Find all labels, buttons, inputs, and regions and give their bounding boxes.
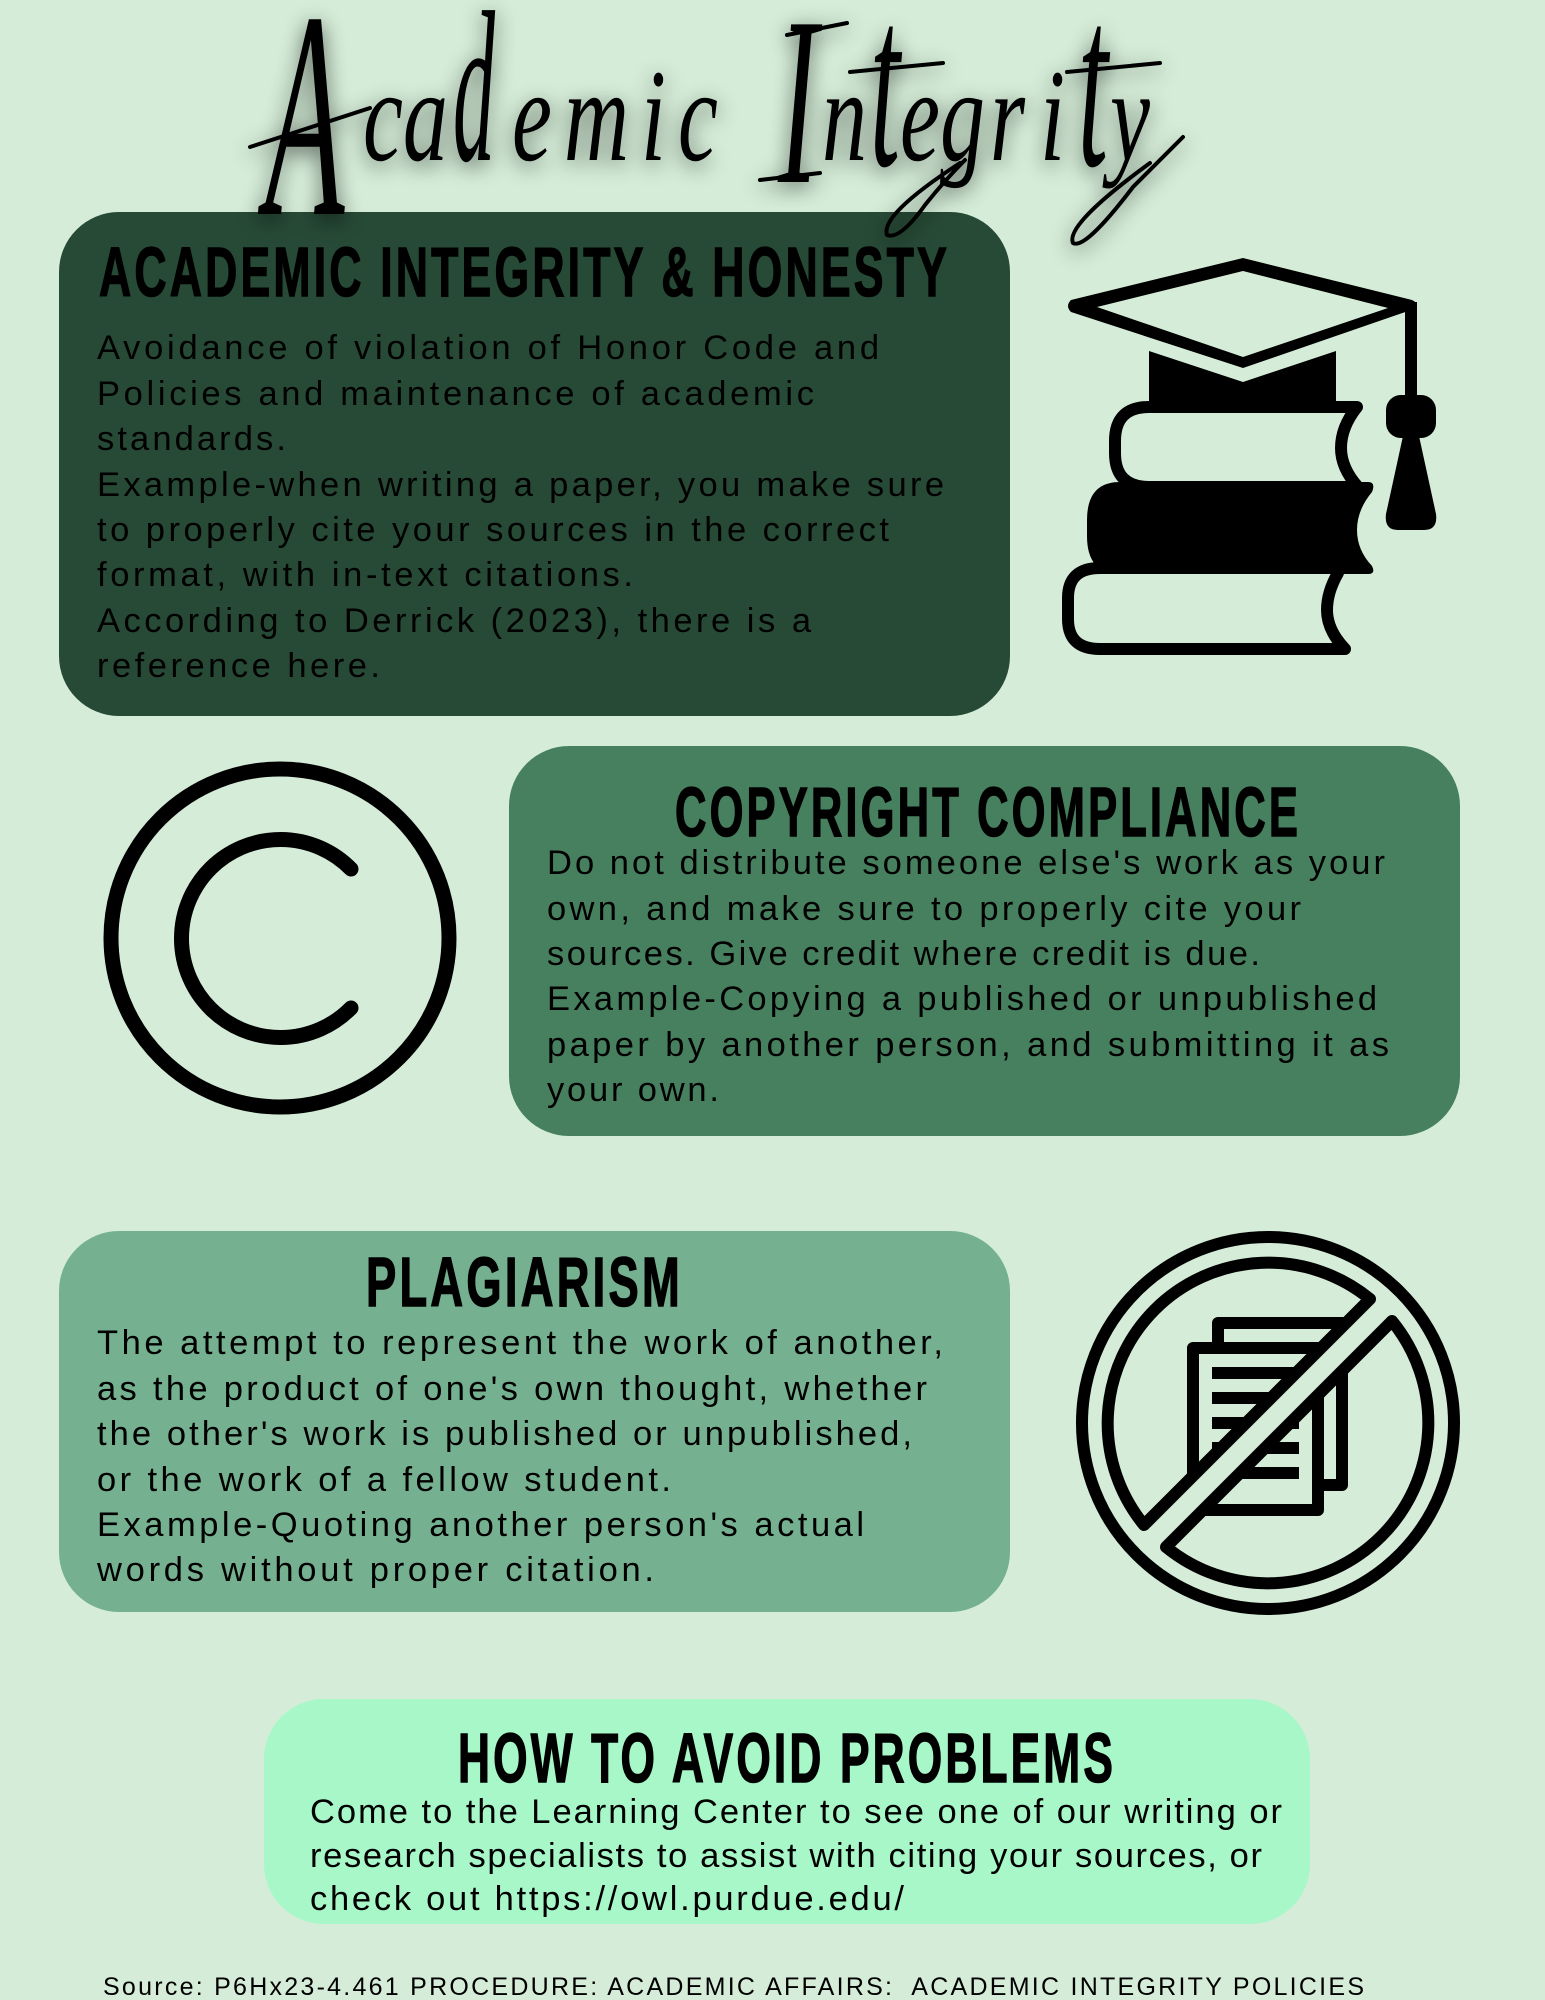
title <box>250 0 1183 279</box>
text block: plagiarism definition and example: Example-Quoting another person's actual <box>97 1506 864 1544</box>
text block: definition and example: standards. <box>97 420 286 458</box>
panel: plagiarism <box>59 1231 1010 1612</box>
text block: copyright definition and example: your own. <box>547 1071 719 1109</box>
text block: learning center advice: Come to the Learning Center to see one of our writing or <box>310 1793 1282 1831</box>
text block: definition and example <box>97 329 944 685</box>
title: y <box>1102 43 1151 189</box>
icon: copyright symbol <box>111 769 449 1107</box>
heading: plagiarism: PLAGIARISM <box>366 1243 683 1321</box>
title: ri <box>990 43 1080 189</box>
text block: learning center advice <box>310 1793 1282 1918</box>
text block: definition and example: Policies and maintenance of academic <box>97 375 814 413</box>
text block: definition and example: Example-when writing a paper, you make sure <box>97 466 944 504</box>
text block: definition and example: to properly cite your sources in the correct <box>97 511 889 549</box>
heading: how to avoid problems: HOW TO AVOID PROBLEMS <box>458 1719 1116 1797</box>
text block: copyright definition and example: paper by another person, and submitting it as <box>547 1026 1389 1064</box>
panel: copyright compliance <box>509 746 1460 1136</box>
title: emic <box>512 43 730 189</box>
text block: plagiarism definition and example <box>96 1324 943 1589</box>
title: ca <box>363 43 448 189</box>
text block: copyright definition and example: own, and make sure to properly cite your <box>547 890 1301 928</box>
text block: plagiarism definition and example: words without proper citation. <box>96 1551 654 1589</box>
text block: learning center advice: research specialists to assist with citing your sources, or <box>310 1837 1262 1875</box>
text block: definition and example: Avoidance of violation of Honor Code and <box>97 329 879 367</box>
title: n <box>822 43 867 189</box>
text block: definition and example: reference here. <box>97 647 380 685</box>
text block: plagiarism definition and example: or the work of a fellow student. <box>97 1461 671 1499</box>
text block: copyright definition and example: Example-Copying a published or unpublished <box>547 980 1377 1018</box>
decorative swashes on the script title <box>250 23 1183 244</box>
text block: copyright definition and example <box>547 844 1389 1109</box>
text block: learning center advice: check out https://owl.purdue.edu/ <box>310 1880 904 1918</box>
icon: graduation cap on books <box>1068 258 1436 649</box>
text block: plagiarism definition and example: the other's work is published or unpublished, <box>97 1415 912 1453</box>
title: g <box>940 43 985 189</box>
text block: definition and example: format, with in-text citations. <box>97 556 633 594</box>
panel: academic integrity and honesty <box>59 212 1010 716</box>
icon: no copying documents <box>1082 1237 1454 1609</box>
text block: plagiarism definition and example: The attempt to represent the work of another, <box>97 1324 943 1362</box>
text block: copyright definition and example: Do not distribute someone else's work as your <box>547 844 1385 882</box>
panel: how to avoid problems <box>264 1699 1310 1924</box>
text block: definition and example: According to Derrick (2023), there is a <box>97 602 812 640</box>
text block: copyright definition and example: sources. Give credit where credit is due. <box>547 935 1260 973</box>
title: e <box>900 43 940 189</box>
heading: academic integrity and honesty: ACADEMIC INTEGRITY & HONESTY <box>99 233 950 311</box>
text block: plagiarism definition and example: as the product of one's own thought, whether <box>97 1370 927 1408</box>
